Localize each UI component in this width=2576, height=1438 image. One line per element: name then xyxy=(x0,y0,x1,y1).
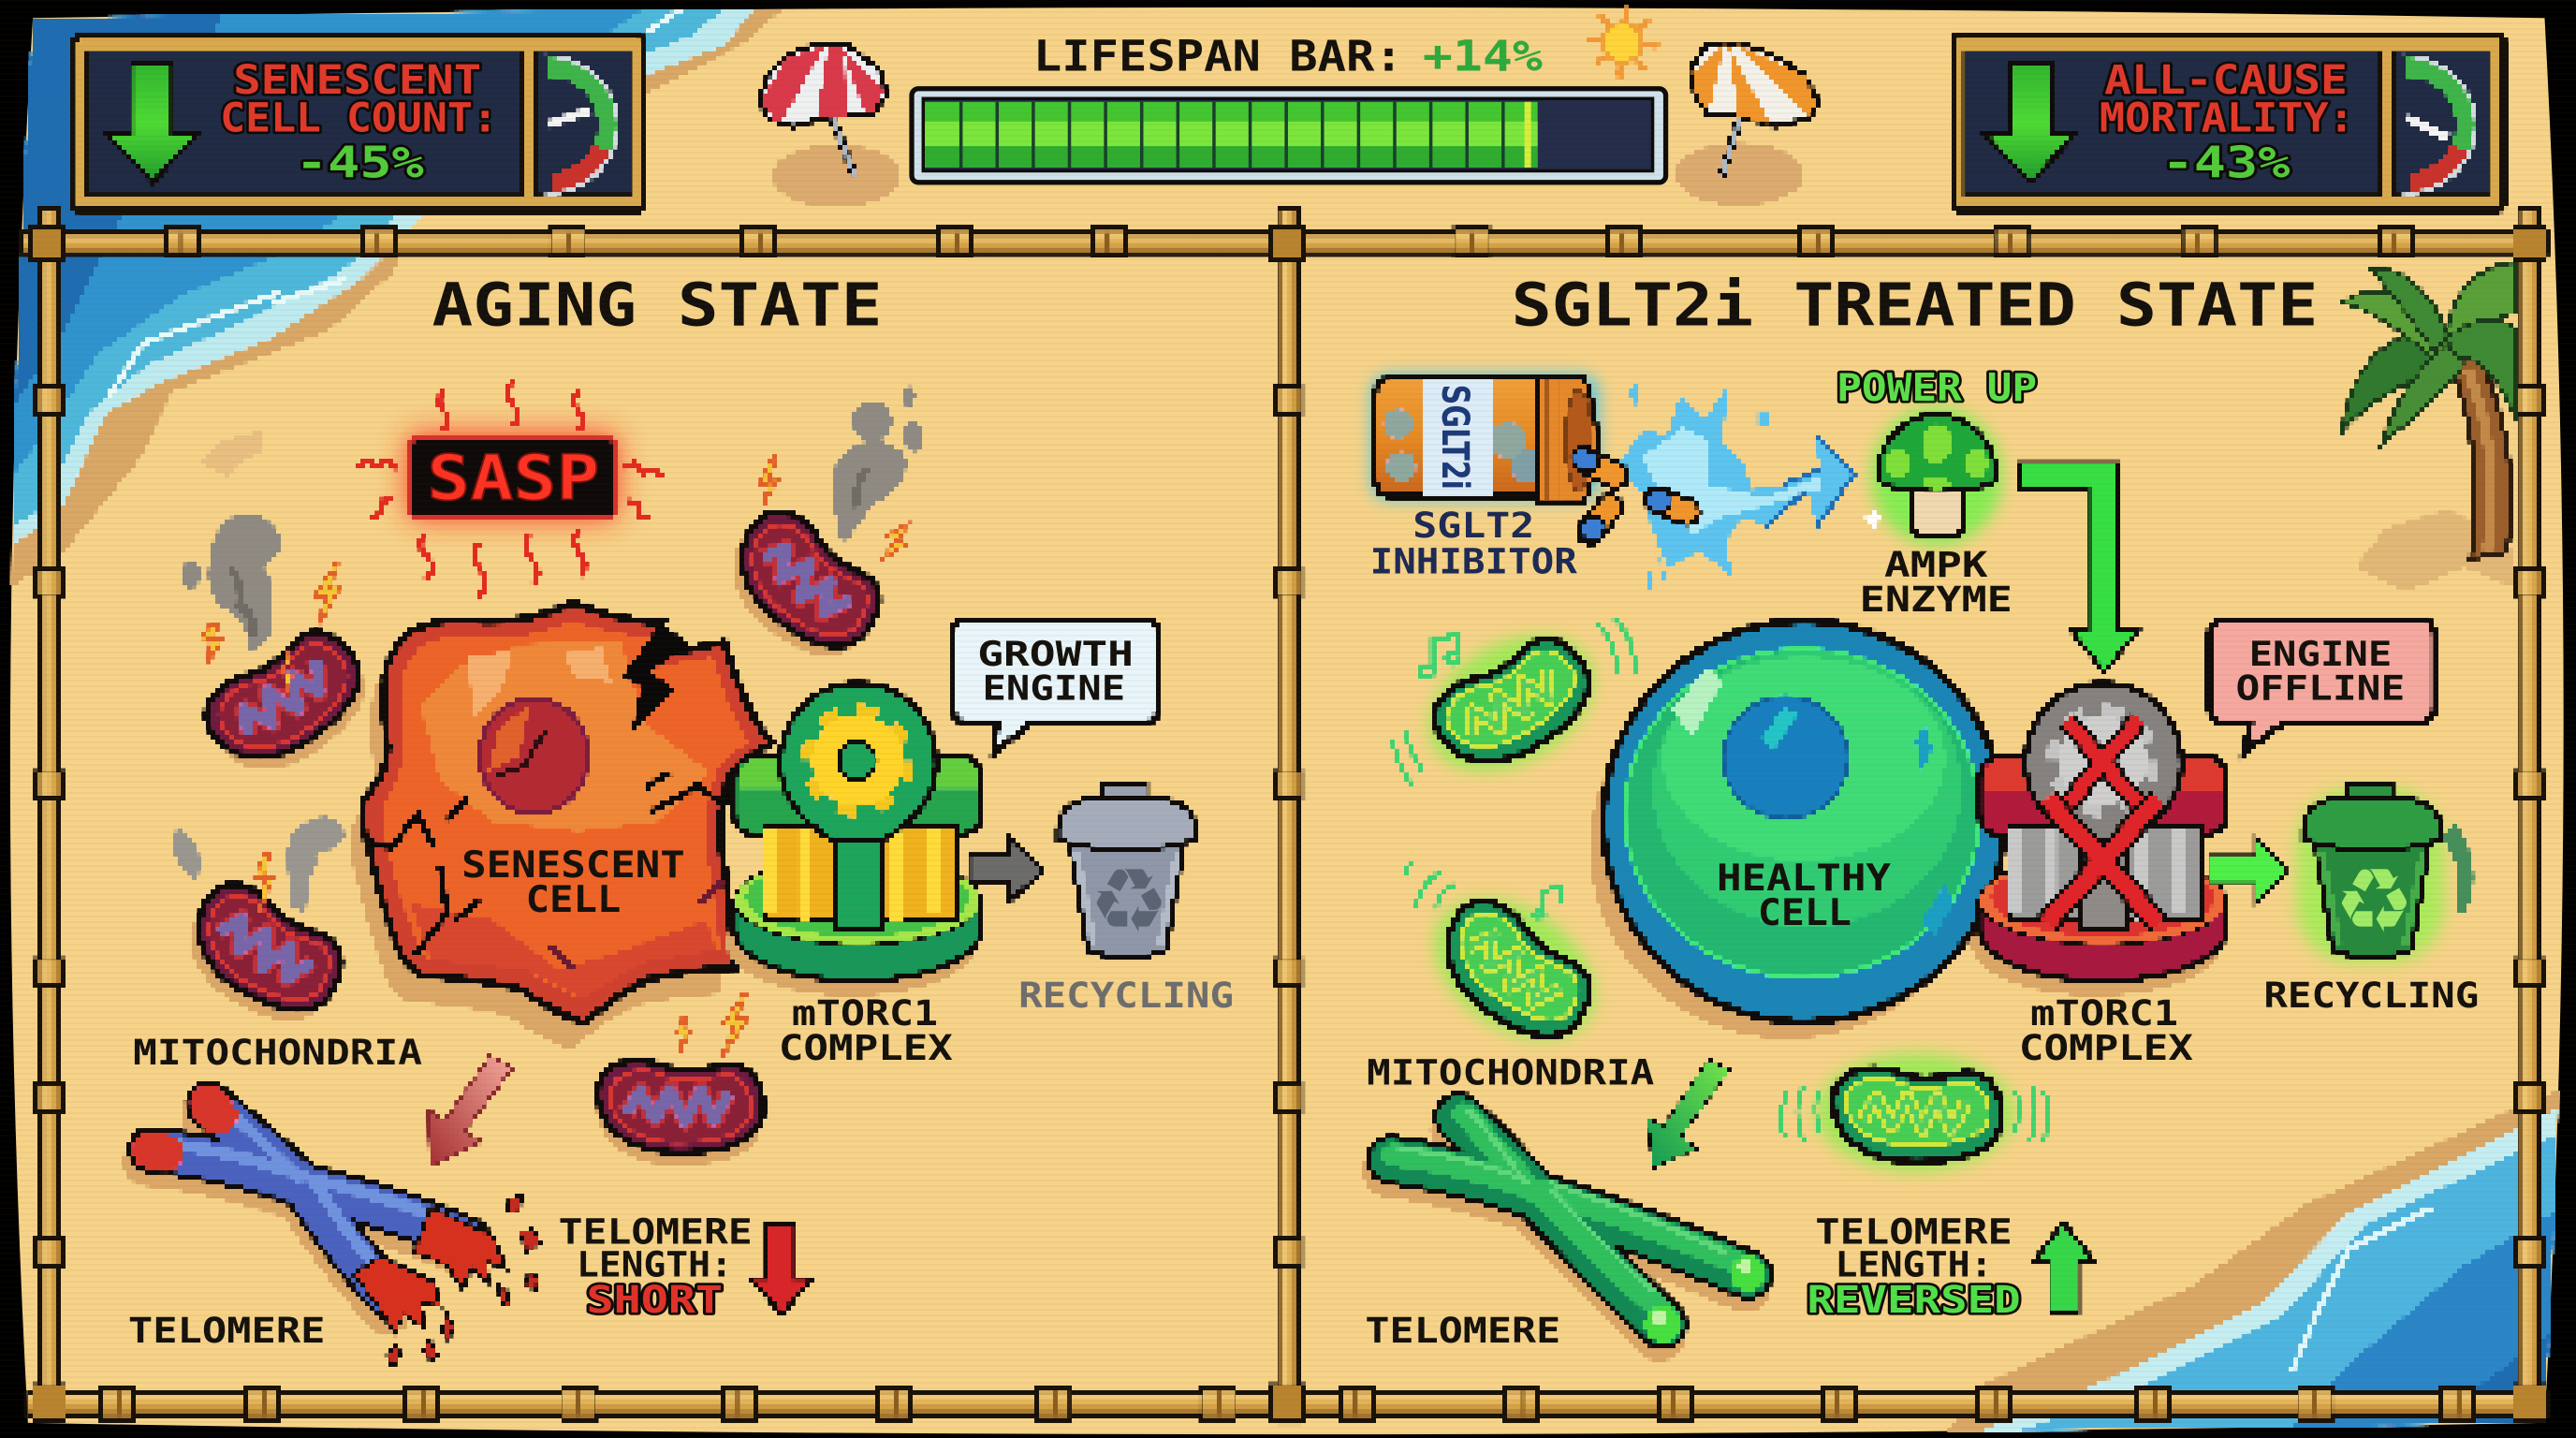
lifespan bar label: +14% xyxy=(1423,31,1544,81)
callout: engine offline xyxy=(2209,620,2435,753)
label: telomere length short: LENGTH: xyxy=(577,1244,733,1285)
icon: green down arrow xyxy=(1984,64,2076,183)
healthy cell: CELL xyxy=(1758,891,1852,934)
label: senescent cell count: -45% xyxy=(296,138,424,188)
mitochondria: healthy bottom xyxy=(1781,1053,2048,1171)
label: power up: POWER UP xyxy=(1837,365,2037,410)
label: SGLT2 inhibitor: INHIBITOR xyxy=(1370,540,1577,581)
mTORC1 complex: active: COMPLEX xyxy=(779,1027,953,1068)
icon: grey trash can xyxy=(1058,785,1196,958)
label: senescent cell count: CELL COUNT: xyxy=(220,95,498,141)
label: senescent cell count xyxy=(220,57,498,188)
SASP sign with heat waves xyxy=(359,381,664,598)
label: telomere length short: TELOMERE xyxy=(559,1211,753,1253)
label: telomere: TELOMERE xyxy=(1365,1310,1560,1351)
palm tree xyxy=(2343,263,2515,592)
label: telomere length reversed xyxy=(1807,1211,2021,1322)
mTORC1 complex: offline: mTORC1 xyxy=(2030,992,2178,1034)
label: telomere: TELOMERE xyxy=(128,1310,325,1351)
mitochondria: damaged bottom xyxy=(596,996,763,1166)
healthy cell: HEALTHY xyxy=(1717,857,1891,900)
arrow: green down-left xyxy=(1647,1060,1730,1168)
arrow: red down-left xyxy=(429,1056,513,1167)
icon: orange umbrella xyxy=(1676,43,1819,205)
callout: engine offline: OFFLINE xyxy=(2236,668,2405,709)
icon: green trash can xyxy=(2296,785,2469,962)
senescent cell: SENESCENT xyxy=(461,844,685,887)
mTORC1 complex: offline: COMPLEX xyxy=(2019,1027,2193,1068)
label: all-cause mortality: -43% xyxy=(2162,138,2290,188)
icon: green trash can: ♻ xyxy=(2334,850,2414,953)
callout: engine offline: ENGINE xyxy=(2249,634,2392,674)
label: telomere length reversed: REVERSED xyxy=(1807,1278,2021,1322)
label: all-cause mortality: MORTALITY: xyxy=(2100,95,2354,141)
arrow: green bent xyxy=(2019,463,2137,672)
mitochondria: damaged lower left xyxy=(168,816,356,1041)
label: AMPK enzyme xyxy=(1860,544,2012,620)
label: telomere length short: SHORT xyxy=(587,1278,723,1322)
mitochondria: healthy lower xyxy=(1405,861,1621,1069)
pills: capsules xyxy=(1569,445,1703,549)
mTORC1 complex: active xyxy=(726,683,981,1068)
icon: sun xyxy=(1588,8,1657,77)
heading: aging state: AGING STATE xyxy=(432,270,882,339)
label: recycling green: RECYCLING xyxy=(2263,975,2479,1016)
mitochondria: healthy upper xyxy=(1393,608,1634,799)
gauge xyxy=(546,56,618,194)
label: AMPK enzyme: AMPK xyxy=(1884,544,1988,585)
label: telomere length reversed: LENGTH: xyxy=(1835,1244,1993,1285)
arrow: red down xyxy=(751,1225,812,1314)
beach: bottom-right water xyxy=(1937,1084,2576,1438)
label: telomere length short xyxy=(559,1211,753,1322)
icon: red umbrella xyxy=(759,44,900,207)
arrow: grey to recycling xyxy=(969,838,1043,902)
gauge xyxy=(2404,56,2476,194)
lifespan bar xyxy=(912,31,1666,183)
scoreboard: senescent cell count xyxy=(74,37,644,211)
panel: aging state xyxy=(128,270,1234,1367)
SASP sign with heat waves: SASP xyxy=(427,442,600,515)
healthy cell xyxy=(1590,621,2004,1038)
chromosome: damaged telomere xyxy=(148,1099,540,1367)
icon: SGLT2 pill bottle: SGLT2i xyxy=(1433,385,1477,490)
beach: top-left water xyxy=(0,0,792,592)
label: AMPK enzyme: ENZYME xyxy=(1860,579,2012,620)
callout: growth engine: GROWTH xyxy=(977,634,1134,674)
icon: grey trash can: ♻ xyxy=(1090,850,1169,953)
heading: treated state: SGLT2i TREATED STATE xyxy=(1512,270,2318,339)
mTORC1 complex: active: mTORC1 xyxy=(792,992,938,1034)
lifespan bar label: LIFESPAN BAR: xyxy=(1033,31,1403,81)
callout: growth engine: ENGINE xyxy=(982,668,1125,709)
lifespan bar label xyxy=(1033,31,1544,81)
senescent cell xyxy=(349,603,772,1049)
label: recycling grey: RECYCLING xyxy=(1018,975,1234,1016)
label: mitochondria: MITOCHONDRIA xyxy=(1367,1051,1655,1093)
mitochondria: damaged upper left xyxy=(181,513,385,795)
label: senescent cell count: SENESCENT xyxy=(233,57,481,104)
label: mitochondria: MITOCHONDRIA xyxy=(133,1032,422,1073)
label: all-cause mortality xyxy=(2100,57,2354,188)
mitochondria: damaged upper right xyxy=(708,386,923,678)
chromosome: restored telomere xyxy=(1388,1110,1766,1343)
arrow: green to recycling xyxy=(2209,838,2290,902)
icon: green down arrow xyxy=(107,64,198,183)
label: telomere length reversed: TELOMERE xyxy=(1815,1211,2012,1253)
panel: SGLT2i treated state xyxy=(1365,263,2515,1351)
footprints in the sand xyxy=(200,431,263,477)
lifespan progress bar xyxy=(912,89,1666,183)
label: all-cause mortality: ALL-CAUSE xyxy=(2104,57,2348,104)
icon: AMPK mushroom xyxy=(1860,407,2002,546)
scoreboard: all-cause mortality xyxy=(1954,37,2504,211)
callout: growth engine xyxy=(953,620,1158,753)
mTORC1 complex: offline xyxy=(1971,683,2226,1068)
senescent cell: CELL xyxy=(526,878,621,921)
icon: SGLT2 pill bottle xyxy=(1371,374,1599,501)
effect: blue splash arrow xyxy=(1617,381,1854,592)
arrow: green up xyxy=(2034,1223,2095,1311)
label: SGLT2 inhibitor: SGLT2 xyxy=(1412,505,1534,546)
label: SGLT2 inhibitor xyxy=(1370,505,1577,581)
